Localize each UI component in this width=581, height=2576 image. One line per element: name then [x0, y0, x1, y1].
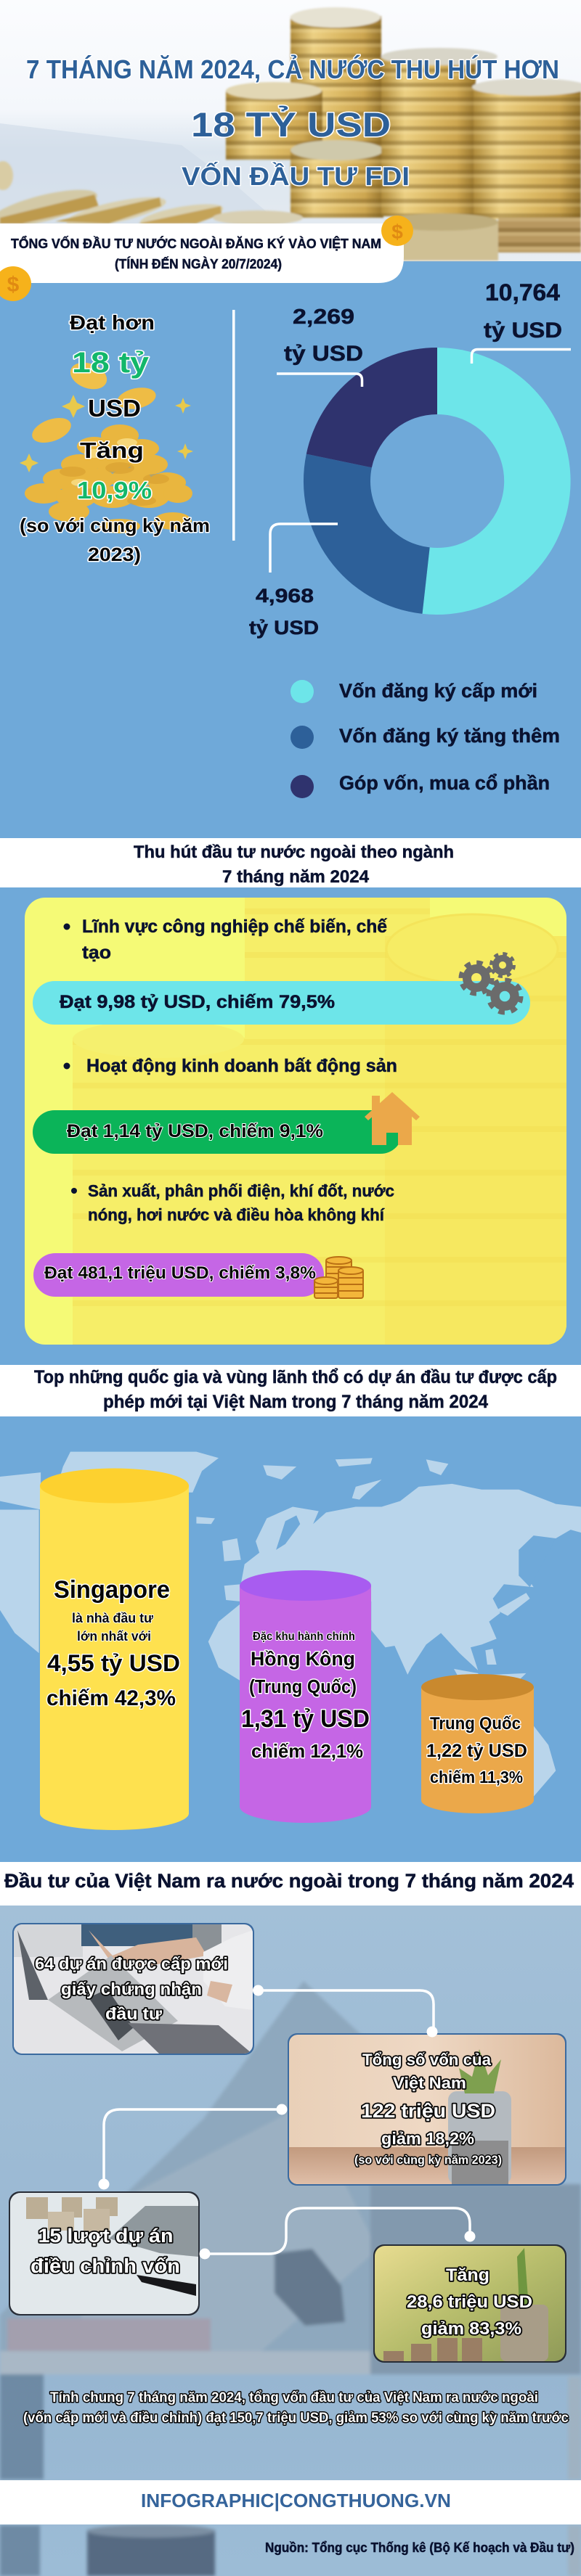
card: increase value: 28,6 triệu USD	[407, 2292, 532, 2312]
source note: Nguồn: Tổng cục Thống kê (Bộ Kế hoạch và Đầu tư)	[265, 2540, 574, 2555]
cylinder: Hong Kong: 1,31 tỷ USD	[241, 1705, 370, 1733]
card: total Vietnamese capital: 122 triệu USD	[361, 2100, 495, 2122]
heading band: outward investment: Đầu tư của Việt Nam ra nước ngoài trong 7 tháng năm 2024	[4, 1870, 574, 1892]
heading band: FDI by sector	[0, 838, 581, 887]
donut value labels: 2,269	[293, 305, 354, 329]
cylinder: Hong Kong: chiếm 12,1%	[251, 1740, 363, 1762]
icon: dollar coin top: $	[391, 221, 403, 243]
cylinder: Singapore: Singapore	[54, 1576, 170, 1604]
bullet: power, gas, water: Sản xuất, phân phối điện, khí đốt, nước	[88, 1181, 394, 1200]
heading band: top investors: Top những quốc gia và vùng lãnh thổ có dự án đầu tư được cấp	[34, 1367, 557, 1387]
world map background	[0, 1452, 581, 1797]
bar: manufacturing value	[33, 981, 530, 1025]
cylinder: Hong Kong: (Trung Quốc)	[249, 1675, 357, 1697]
segment: capital contribution and share purchase	[306, 348, 437, 467]
card: new projects	[12, 1923, 254, 2055]
legend: Vốn đăng ký tăng thêm	[339, 725, 560, 747]
heading band: FDI by sector: 7 tháng năm 2024	[222, 867, 370, 887]
donut value labels: tỷ USD	[249, 617, 319, 639]
donut value labels: tỷ USD	[284, 342, 363, 366]
summary paragraph: (vốn cấp mới và điều chỉnh) đạt 150,7 triệu USD, giảm 53% so với cùng kỳ năm trước	[23, 2411, 569, 2426]
bullet: manufacturing	[64, 916, 387, 963]
cylinder: Singapore: chiếm 42,3%	[46, 1686, 176, 1710]
bullet: manufacturing: tạo	[82, 943, 111, 963]
illustration: gold coin pile	[20, 358, 193, 533]
footer band: publisher	[0, 2480, 581, 2524]
legend: Vốn đăng ký cấp mới	[339, 680, 537, 702]
footer band: publisher: INFOGRAPHIC|CONGTHUONG.VN	[141, 2490, 451, 2511]
cylinder: Singapore: lớn nhất với	[77, 1629, 151, 1644]
legend	[290, 680, 560, 798]
bar chart: cylinders	[40, 1469, 534, 1830]
card: increase value	[373, 2244, 566, 2363]
cylinder: Hong Kong: Đặc khu hành chính	[253, 1630, 355, 1643]
summary text: over 18 billion USD, up 10.9%	[20, 311, 210, 565]
cylinder: China: 1,22 tỷ USD	[426, 1741, 527, 1761]
card: adjusted projects: điều chỉnh vốn	[31, 2255, 180, 2277]
heading panel: total registered capital	[0, 223, 404, 283]
header title: VỐN ĐẦU TƯ FDI	[182, 162, 410, 191]
card: adjusted projects: 15 lượt dự án	[38, 2225, 173, 2247]
card: increase value: Tăng	[446, 2265, 489, 2285]
summary text: over 18 billion USD, up 10.9%: (so với cùng kỳ năm	[20, 514, 210, 536]
donut value labels: tỷ USD	[484, 319, 562, 342]
card: increase value: giảm 83,3%	[421, 2319, 521, 2339]
cylinder: Singapore: là nhà đầu tư	[72, 1611, 154, 1625]
cylinder: Hong Kong: Hồng Kông	[251, 1648, 355, 1670]
legend: Góp vốn, mua cổ phần	[339, 772, 550, 794]
bar: power value: Đạt 481,1 triệu USD, chiếm 3,8%	[44, 1263, 316, 1283]
icon: dollar coin left: $	[7, 273, 20, 297]
icon: gears	[461, 953, 521, 1012]
heading panel: total registered capital: (TÍNH ĐẾN NGÀY 20/7/2024)	[115, 256, 282, 271]
bar: power value	[33, 1253, 324, 1297]
heading band: top investors	[0, 1365, 581, 1416]
leader lines	[270, 350, 571, 573]
card: adjusted projects	[9, 2191, 200, 2315]
card: new projects: giấy chứng nhận	[61, 1980, 202, 1998]
donut value labels: 10,764	[485, 279, 560, 305]
summary paragraph: Tính chung 7 tháng năm 2024, tổng vốn đầu tư của Việt Nam ra nước ngoài	[50, 2390, 538, 2405]
card: new projects: đầu tư	[105, 2004, 162, 2023]
header photo: gold coin stacks	[0, 0, 581, 261]
bar: real estate value	[33, 1110, 402, 1154]
summary text: over 18 billion USD, up 10.9%: 10,9%	[77, 477, 152, 504]
heading band: FDI by sector: Thu hút đầu tư nước ngoài theo ngành	[134, 842, 454, 862]
summary text: over 18 billion USD, up 10.9%: Tăng	[80, 438, 144, 463]
bottom background photo	[0, 1906, 581, 2576]
summary text: over 18 billion USD, up 10.9%: Đạt hơn	[70, 311, 155, 334]
bar: manufacturing value: Đạt 9,98 tỷ USD, chiếm 79,5%	[60, 992, 335, 1012]
segment: additional registered capital	[304, 454, 430, 614]
header title	[26, 54, 559, 191]
icon: dollar coin top	[381, 216, 413, 246]
segment: new registered capital	[423, 348, 571, 615]
heading panel: total registered capital: TỔNG VỐN ĐẦU TƯ NƯỚC NGOÀI ĐĂNG KÝ VÀO VIỆT NAM	[11, 236, 381, 251]
summary text: over 18 billion USD, up 10.9%: 18 tỷ	[72, 347, 150, 379]
connectors	[104, 1990, 470, 2254]
summary text: over 18 billion USD, up 10.9%: USD	[88, 395, 141, 422]
card: total Vietnamese capital: (so với cùng kỳ năm 2023)	[354, 2154, 502, 2167]
cylinder: China: Trung Quốc	[430, 1714, 521, 1734]
donut value labels: 4,968	[256, 585, 314, 607]
card: new projects: 64 dự án được cấp mới	[35, 1954, 228, 1973]
header title: 18 TỶ USD	[191, 105, 391, 144]
card: total Vietnamese capital	[288, 2033, 566, 2186]
bullet: manufacturing: Lĩnh vực công nghiệp chế biến, chế	[82, 916, 387, 937]
summary text: over 18 billion USD, up 10.9%: 2023)	[88, 543, 141, 565]
connector dots	[99, 1985, 475, 2260]
bullet: real estate: Hoạt động kinh doanh bất động sản	[86, 1056, 397, 1076]
cylinder: China: chiếm 11,3%	[430, 1768, 523, 1787]
divider line	[232, 310, 235, 541]
panel: sectors	[25, 898, 566, 1345]
icon: coin stacks	[314, 1257, 363, 1298]
cylinder: Hong Kong	[240, 1570, 371, 1823]
cylinder: Singapore	[40, 1469, 189, 1830]
summary paragraph	[23, 2390, 569, 2426]
card: total Vietnamese capital: Tổng số vốn của	[362, 2051, 492, 2069]
heading band: top investors: phép mới tại Việt Nam trong 7 tháng năm 2024	[103, 1392, 488, 1412]
bar: real estate value: Đạt 1,14 tỷ USD, chiếm 9,1%	[67, 1121, 323, 1141]
card: total Vietnamese capital: giảm 18,2%	[381, 2129, 474, 2148]
heading band: outward investment	[0, 1862, 581, 1906]
donut value labels	[249, 279, 562, 639]
cylinder: Singapore: 4,55 tỷ USD	[47, 1650, 180, 1676]
icon: dollar coin left	[0, 266, 31, 301]
bullet: power, gas, water: nóng, hơi nước và điều hòa không khí	[88, 1205, 386, 1224]
card: total Vietnamese capital: Việt Nam	[393, 2074, 466, 2092]
cylinder: China	[421, 1674, 534, 1813]
bullet: power, gas, water	[71, 1181, 394, 1224]
donut chart: capital structure	[304, 348, 571, 615]
icon: house	[365, 1092, 420, 1145]
